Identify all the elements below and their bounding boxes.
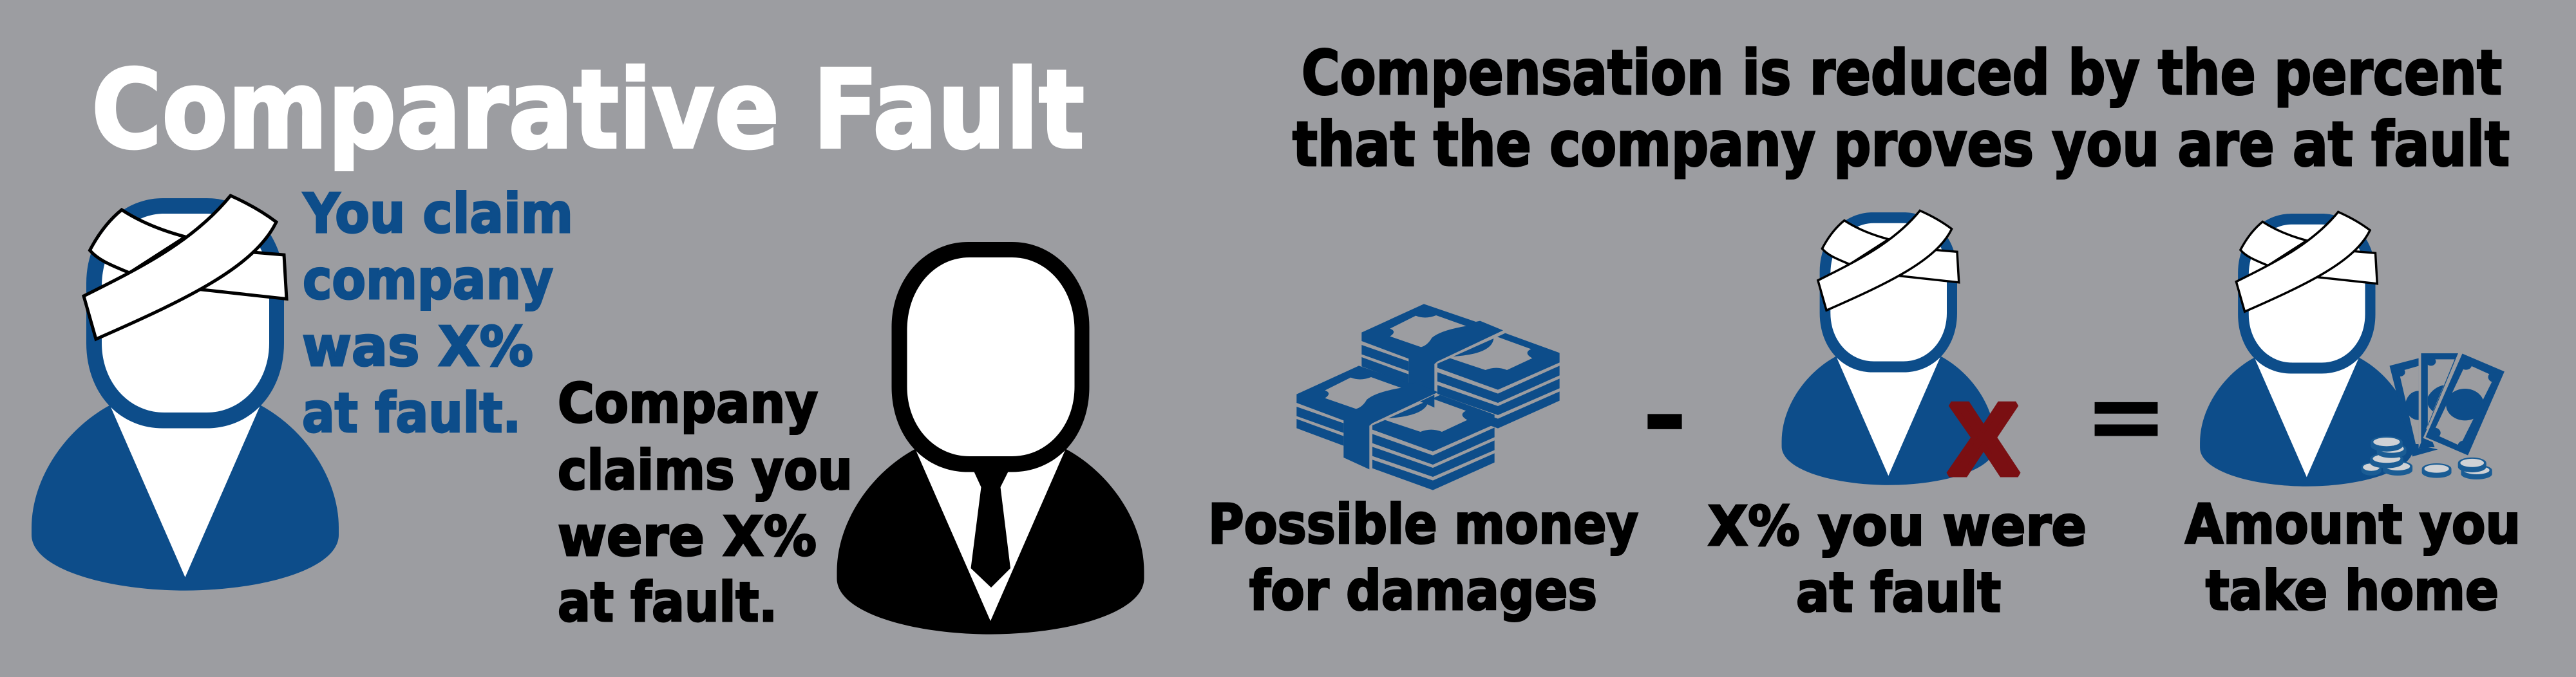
icon: injured claimant [32, 196, 339, 591]
text: your claim: at fault. [302, 382, 521, 445]
label: possible money [1208, 493, 1638, 623]
icon: injured person with money [2200, 212, 2506, 487]
heading: compensation rule [1293, 38, 2510, 180]
label: percent at fault [1708, 495, 2087, 625]
minus sign: - [1642, 354, 1688, 478]
label: percent at fault: X% you were [1708, 495, 2087, 559]
text: company claim: at fault. [558, 571, 777, 635]
icon: injured person with fault mark [1782, 210, 2019, 496]
text: company claim: Company [558, 372, 818, 436]
bills and coins [2362, 353, 2506, 479]
label: amount you take home [2185, 493, 2521, 623]
label: possible money: Possible money [1208, 493, 1638, 557]
title: Comparative Fault [91, 46, 1084, 173]
text: company claim [558, 372, 853, 635]
text: your claim: was X% [302, 315, 533, 379]
label: amount you take home: Amount you [2185, 493, 2521, 557]
icon: money stacks [1296, 304, 1560, 490]
red X: X [1948, 383, 2019, 496]
text: company claim: claims you [558, 439, 853, 503]
text: your claim [302, 182, 573, 445]
icon: company representative [837, 242, 1144, 635]
equals sign: = [2084, 357, 2168, 474]
necktie [971, 471, 1010, 588]
text: company claim: were X% [558, 505, 817, 569]
label: percent at fault: at fault [1796, 561, 2001, 625]
label: possible money: for damages [1249, 559, 1597, 623]
text: your claim: company [303, 248, 553, 312]
text: your claim: You claim [303, 182, 573, 246]
label: amount you take home: take home [2206, 559, 2499, 623]
